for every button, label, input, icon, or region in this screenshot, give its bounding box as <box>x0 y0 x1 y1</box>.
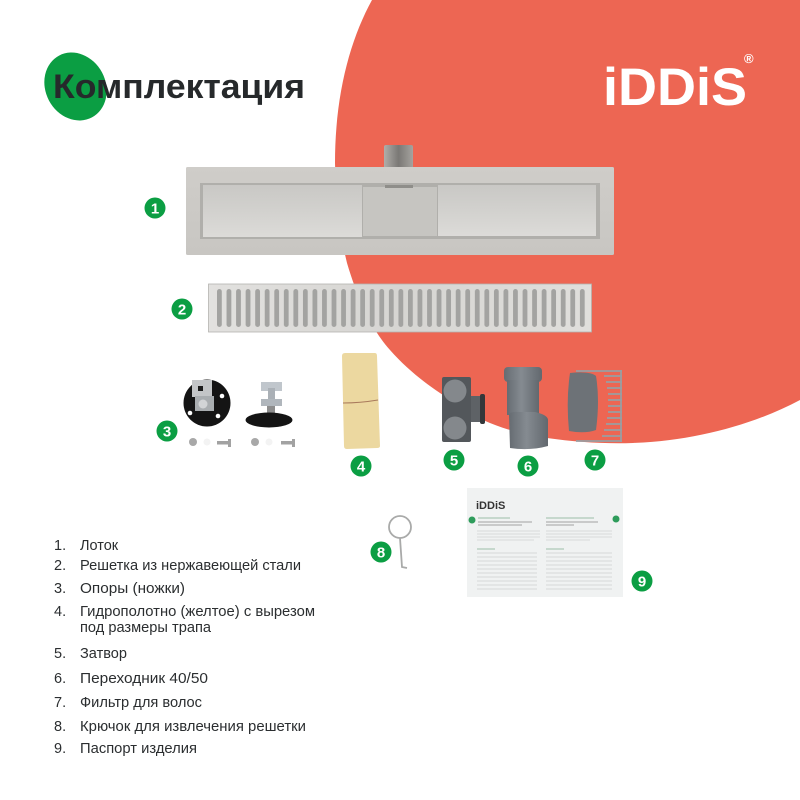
parts list: 4. <box>54 604 66 620</box>
item 8: hook <box>389 516 411 568</box>
item 4: membrane <box>342 353 380 449</box>
parts list: Лоток <box>80 538 119 554</box>
parts list: под размеры трапа <box>80 620 212 636</box>
parts list: 5. <box>54 646 66 662</box>
item 9: passport: iDDiS <box>476 500 505 512</box>
badge 5: 5 <box>450 452 458 470</box>
green blob <box>33 42 118 131</box>
parts list: Переходник 40/50 <box>80 671 208 687</box>
badge 1 <box>144 198 166 218</box>
item 1: tray <box>186 145 614 255</box>
item 7: hair filter <box>568 370 622 442</box>
badge 5 <box>444 450 464 470</box>
badge 9 <box>632 570 652 592</box>
background red shape <box>335 0 800 443</box>
parts list: 1. <box>54 538 66 554</box>
parts list: 3. <box>54 581 66 597</box>
item 2: grate <box>208 284 592 332</box>
badge 4: 4 <box>357 458 366 476</box>
badge 9: 9 <box>638 574 646 590</box>
badge 7 <box>584 450 606 470</box>
badge 6: 6 <box>524 458 532 476</box>
parts list <box>54 538 315 757</box>
parts list: Затвор <box>80 646 127 662</box>
parts list: 8. <box>54 719 66 735</box>
badge 2: 2 <box>178 302 186 318</box>
title text: Комплектация <box>53 68 305 106</box>
parts list: Гидрополотно (желтое) с вырезом <box>80 604 315 620</box>
parts list: 7. <box>54 695 66 711</box>
parts list: Фильтр для волос <box>80 695 202 711</box>
badge 4 <box>350 456 372 476</box>
parts list: Решетка из нержавеющей стали <box>80 558 301 574</box>
badge 1: 1 <box>151 200 159 218</box>
badge 8 <box>370 542 392 562</box>
logo: ® <box>744 51 754 66</box>
item 9: passport <box>467 488 623 597</box>
title <box>33 42 305 131</box>
parts list: Опоры (ножки) <box>80 581 185 597</box>
parts list: 2. <box>54 558 66 574</box>
badge 2 <box>172 298 192 320</box>
logo: iDDiS <box>603 58 747 117</box>
badge 8: 8 <box>377 544 385 562</box>
badge 6 <box>518 456 538 476</box>
parts list: 9. <box>54 741 66 757</box>
badge 7: 7 <box>591 452 599 470</box>
item 3: supports <box>184 380 295 447</box>
item 5: trap <box>442 377 485 442</box>
parts list: Крючок для извлечения решетки <box>80 719 306 735</box>
item 6: adapter <box>504 367 548 449</box>
parts list: 6. <box>54 671 66 687</box>
badge 3 <box>156 420 178 442</box>
badge 3: 3 <box>163 424 171 440</box>
parts list: Паспорт изделия <box>80 741 197 757</box>
